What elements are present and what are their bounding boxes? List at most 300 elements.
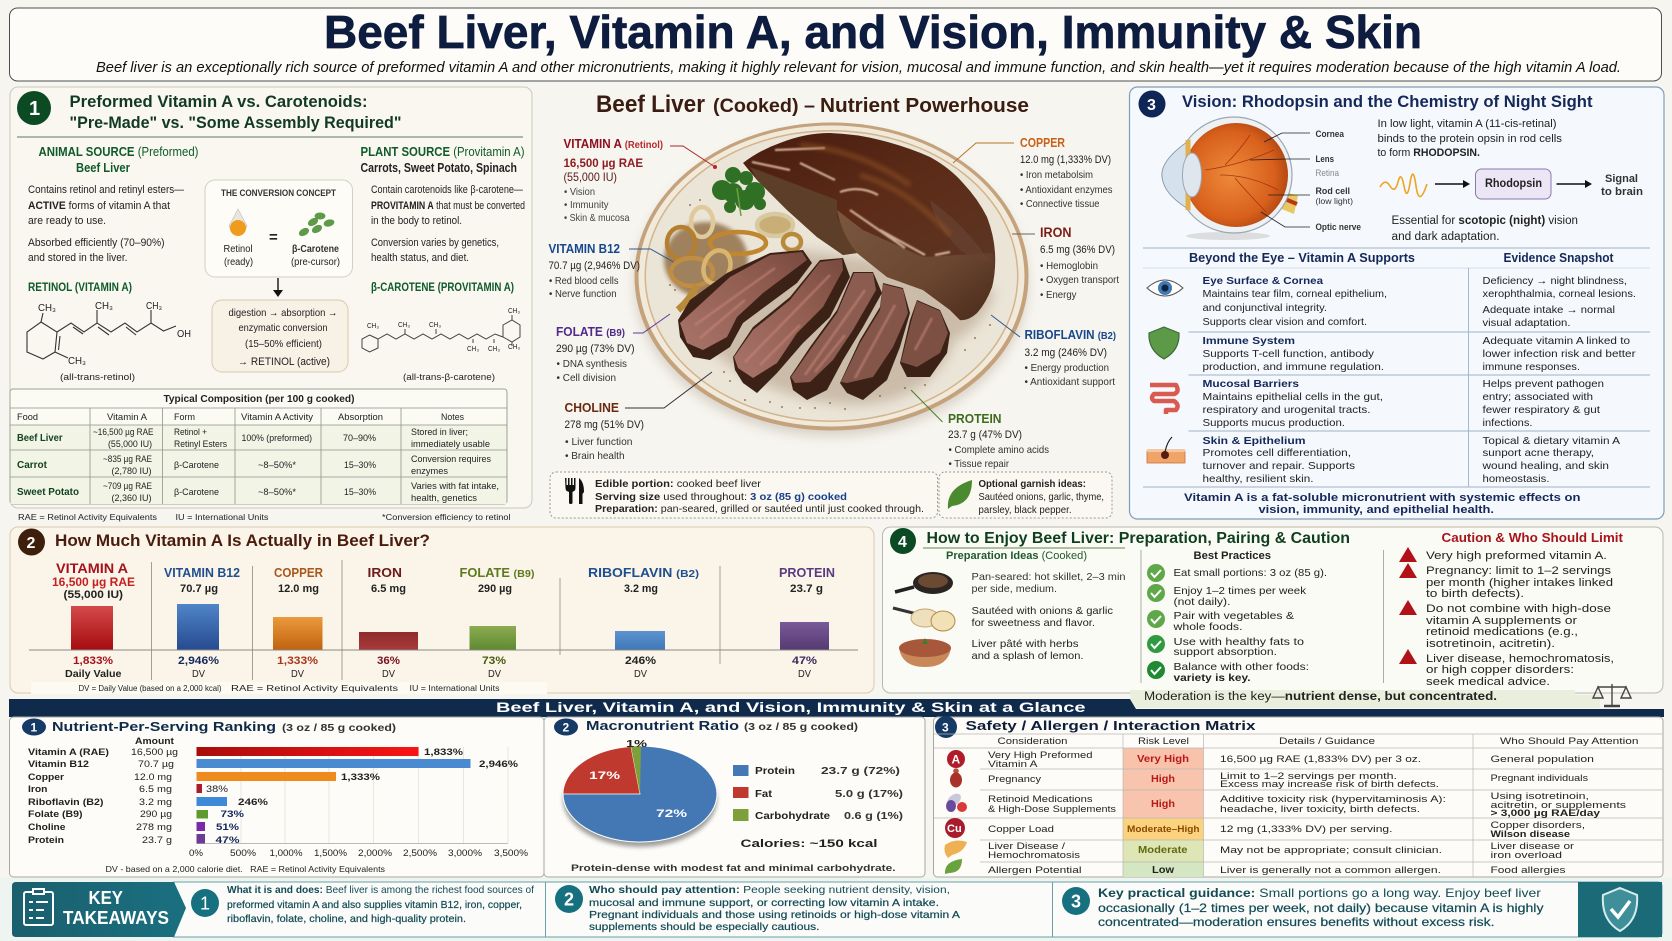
row: copper load: Moderate–High [1127,824,1200,835]
center heading: Nutrient Powerhouse [820,95,1029,117]
glance panel 2: macronutrient ratio: (3 oz / 85 g cooked) [744,722,858,733]
bar: copper: COPPER [274,566,323,580]
bar: vitamin B12: 2,946% [178,655,219,667]
row: immune system: Supports T-cell function, antibody [1202,348,1375,360]
icon: onions [893,608,955,631]
row: vitamin B12: 70.7 µg [138,759,174,770]
composition table: 100% (preformed) [242,433,312,444]
callout: folate: • DNA synthesis [556,358,627,370]
takeaway 2: Pregnant individuals and those using retinoids or high-dose vitamin A [589,909,960,921]
rhodopsin pathway [1380,169,1643,199]
takeaway 3: Key practical guidance: Small portions go a long way. Enjoy beef liver [1098,886,1541,900]
row: liver disease [944,841,1574,861]
composition table: ~16,500 µg RAE [93,427,154,438]
badge 1 [17,91,51,125]
row: pregnancy: Excess may increase risk of birth defects. [1220,779,1439,790]
row: choline: 278 mg [136,822,172,833]
row: retinoid medications: headache, liver toxicity, birth defects. [1220,804,1420,815]
icon: leaf [948,480,972,509]
preparation ideas: Sautéed with onions & garlic [972,605,1113,617]
row: retinoid medications: & High-Dose Supplements [988,804,1116,815]
row: liver disease: Moderate [1138,845,1188,856]
panel 2 footnote: IU = International Units [410,684,500,693]
pie legend: 5.0 g (17%) [835,788,903,800]
pie chart: 17% [589,770,620,782]
callout: vitamin B12: VITAMIN B12 [548,241,620,256]
digestion steps box: enzymatic conversion [238,322,328,334]
center heading: (Cooked) – [713,96,815,117]
panel 1 heading: "Pre-Made" vs. "Some Assembly Required" [70,113,402,132]
pie legend: Carbohydrate [755,810,830,822]
composition table: Vitamin A [107,412,148,423]
bar: protein [779,566,835,680]
beta-carotene structure: β-CAROTENE (PROVITAMIN A) [371,280,514,294]
animal source column [28,145,198,264]
row: pregnancy [950,768,1588,790]
row: eye surface: Adequate intake → normal [1482,304,1615,316]
bar: vitamin A: 1,833% [73,655,113,667]
slice 5 [900,300,950,377]
takeaway 3 [1062,886,1544,929]
row: folate [28,809,245,820]
callout: vitamin A: • Skin & mucosa [564,212,630,224]
icon: eye [1147,280,1183,296]
pie legend: 23.7 g (72%) [821,765,900,777]
row: vitamin A: Vitamin A (RAE) [28,747,109,758]
best practices: Pair with vegetables & [1174,610,1294,622]
row: liver disease: Liver disease or [1490,841,1574,852]
badge: 1 [30,720,38,734]
row: eye surface: Maintains tear film, corneal epithelium, [1202,288,1387,300]
callout: copper: • Antioxidant enzymes [1020,184,1112,196]
column chart: nutrient bars [29,561,858,680]
best practices: Enjoy 1–2 times per week [1174,585,1307,597]
pie chart [563,739,717,847]
bar: folate: FOLATE (B9) [460,566,534,580]
beta-carotene structure [362,280,520,383]
callout: protein: 23.7 g (47% DV) [948,429,1022,441]
row: immune system: Adequate vitamin A linked to [1482,335,1630,347]
row: copper load: Copper Load [988,824,1054,835]
callout: riboflavin: 3.2 mg (246% DV) [1024,347,1107,359]
garnish note: Sautéed onions, garlic, thyme, [978,491,1104,503]
x axis labels [189,848,528,858]
eye anatomy diagram: Optic nerve [1316,222,1361,233]
right lower lobe [837,210,994,320]
row: eye surface: and conjunctival integrity. [1202,302,1327,314]
row: skin and epithelium: Topical & dietary vitamin A [1482,435,1620,447]
caution list: Very high preformed vitamin A. [1426,550,1607,562]
caution list: per month (higher intakes linked [1426,577,1613,589]
composition table: ~709 µg RAE [103,481,152,492]
composition table: (2,360 IU) [112,493,152,504]
row: protein: 47% [216,835,240,846]
callout: vitamin A: VITAMIN A (Retinol) [564,136,663,151]
row: very high vitamin A: 16,500 µg RAE (1,833% DV) per 3 oz. [1220,754,1421,765]
garnish note [939,472,1112,518]
icon: intestine [1150,385,1178,414]
row: skin and epithelium: sunport acne therapy, [1482,447,1594,459]
rhodopsin explanation: In low light, vitamin A (11-cis-retinal) [1378,118,1556,130]
preparation ideas: for sweetness and flavor. [972,617,1095,629]
bar: copper: 1,333% [277,655,318,667]
row: retinoid medications: Additive toxicity risk (hypervitaminosis A): [1220,794,1446,805]
bar: protein: DV [798,668,811,680]
row: immune system: immune responses. [1482,361,1580,373]
gloss highlights [752,148,950,255]
badge: 3 [942,720,949,734]
pie legend: Fat [755,788,773,800]
composition table: (2,780 IU) [112,466,152,477]
panel 2: how much vitamin A [10,527,874,694]
bar: riboflavin [588,566,699,680]
composition table: 15–30% [344,460,376,471]
panel 2 footnote: DV = Daily Value (based on a 2,000 kcal) [78,684,222,693]
callout: vitamin A: (55,000 IU) [564,170,617,184]
row: protein: Protein [28,835,64,846]
panel 2 heading: How Much Vitamin A Is Actually in Beef Liver? [55,532,430,550]
caution list: retinoid medications (e.g., [1426,626,1578,638]
bar: vitamin A: Daily Value [65,668,122,680]
row: protein: 23.7 g [142,835,172,846]
row: folate: 290 µg [140,809,172,820]
whole liver [743,133,995,320]
digestion steps box: (15–50% efficient) [245,338,322,350]
bar: protein: PROTEIN [779,566,835,580]
bar: vitamin A [52,561,135,680]
row: copper: Copper [28,772,64,783]
bar: vitamin A: 16,500 µg RAE [52,577,135,589]
icon: shield check [1578,882,1662,937]
row: very high vitamin A: Very High [1137,754,1189,765]
key takeaways label: KEY [88,887,124,908]
preparation ideas: Pan-seared: hot skillet, 2–3 min [972,571,1126,583]
row: retinoid medications: Retinoid Medications [988,794,1093,805]
bar: riboflavin: 3.2 mg [624,583,658,595]
matrix header: Details / Guidance [1279,736,1375,747]
row: immune system: production, and immune regulation. [1202,361,1384,373]
takeaway 2 [555,884,960,933]
badge 1: 1 [29,98,40,120]
row: mucosal barriers: Mucosal Barriers [1202,378,1299,390]
badge: 2 [562,720,570,734]
beta-carotene structure: CH₃ [367,323,379,330]
x axis labels: 0% [189,848,203,858]
horizontal bar chart: Amount [135,736,175,747]
ranking footnote: DV - based on a 2,000 calorie diet. RAE = Retinol Activity Equivalents [106,864,385,874]
horizontal bar chart [28,736,528,858]
icon: green leaf [945,859,962,874]
row: riboflavin: 3.2 mg [139,797,172,808]
icon: fork and knife [565,478,584,504]
panel 2 footnote: RAE = Retinol Activity Equivalents [231,684,398,693]
key takeaways label: TAKEAWAYS [63,907,169,928]
animal source column: Contains retinol and retinyl esters— [28,184,184,196]
slice 2 [733,258,850,393]
row: riboflavin: 246% [238,797,269,808]
row: immune system: lower infection risk and better [1482,348,1636,360]
retinol structure: (all-trans-retinol) [60,372,135,383]
parsley garnish [712,167,766,216]
row: iron: 6.5 mg [139,784,172,795]
callout: riboflavin: RIBOFLAVIN (B2) [1024,327,1116,342]
icon: pregnancy [950,768,962,788]
edible portion note [550,472,938,518]
section banner: at a glance: Beef Liver, Vitamin A, and Vision, Immunity & Skin at a Glance [496,699,1086,715]
bar: vitamin B12: VITAMIN B12 [164,566,240,580]
x axis labels: 500% [230,848,256,858]
row: iron: Iron [28,784,48,795]
row: copper: 12.0 mg [134,772,172,783]
icon: pate bowl [899,638,951,667]
edible portion note: Preparation: pan-seared, grilled or sautéed until just cooked through. [595,503,924,515]
row: protein [28,834,240,846]
row: copper load: 12 mg (1,333% DV) per serving. [1220,824,1392,835]
macro heading: Macronutrient Ratio [586,718,739,733]
bar: vitamin B12: 70.7 µg [180,583,218,595]
composition table: Notes [441,412,464,423]
row: immune system [1149,327,1636,373]
row: allergen potential: Low [1152,865,1174,876]
row: mucosal barriers: Maintains epithelial cells in the gut, [1202,391,1383,403]
row: very high vitamin A: Very High Preformed [988,750,1092,761]
bar: vitamin A: (55,000 IU) [64,589,123,601]
rhodopsin explanation: to form RHODOPSIN. [1378,147,1480,159]
callout: choline: 278 mg (51% DV) [564,419,644,431]
bar: folate: DV [488,668,501,680]
row: vitamin B12: Vitamin B12 [28,759,89,770]
row: very high vitamin A: General population [1490,754,1594,765]
takeaway 1: riboflavin, folate, choline, and high-quality protein. [227,913,466,925]
callout: protein: • Tissue repair [948,458,1009,470]
edible portion note: Edible portion: cooked beef liver [595,478,762,490]
icon: retinol drop [229,209,247,236]
row: copper load: Wilson disease [1490,829,1570,840]
caution list: Liver disease, hemochromatosis, [1426,653,1614,665]
retinol structure: RETINOL (VITAMIN A) [28,280,132,294]
plate specks [670,200,990,409]
preparation ideas: and a splash of lemon. [972,650,1084,662]
retinol structure: CH₃ [38,303,56,314]
bar: folate: 290 µg [478,583,512,595]
retinol structure: CH₃ [146,301,162,312]
callout: folate [556,314,670,384]
row: choline: Choline [28,822,66,833]
row: skin and epithelium: Skin & Epithelium [1202,435,1306,447]
eye anatomy diagram: Cornea [1316,129,1345,140]
best practices: support absorption. [1174,646,1277,658]
retinol structure [27,280,191,383]
row: riboflavin: Riboflavin (B2) [28,797,104,808]
arrow: conversion down [273,278,283,297]
composition table: Vitamin A Activity [241,412,313,423]
plant source column: Carrots, Sweet Potato, Spinach [360,161,517,175]
scotopic note: Essential for scotopic (night) vision [1392,215,1578,227]
icon: pills [945,791,967,812]
table footnotes [18,512,511,522]
row: retinoid medications: High [1151,799,1175,810]
moderation banner [1130,684,1631,708]
row: very high vitamin A: Vitamin A [988,759,1038,770]
callout: iron: IRON [1040,225,1072,240]
row: retinoid medications: acitretin, or supplements [1490,800,1626,811]
row: skin and epithelium: homeostasis. [1482,473,1550,485]
callout: folate: FOLATE (B9) [556,324,625,339]
conversion concept box: (pre-cursor) [291,257,340,268]
bar: iron: DV [382,668,395,680]
badge [22,718,46,736]
scotopic note: and dark adaptation. [1392,231,1500,243]
best practices: Balance with other foods: [1174,661,1309,673]
icon: check marks [1147,564,1165,679]
row: riboflavin [28,797,269,808]
glance panel 1: nutrient ranking [10,717,544,877]
bar: copper [273,566,323,680]
callout: iron: • Energy [1040,289,1077,301]
callout: vitamin B12: 70.7 µg (2,946% DV) [548,260,640,272]
bar: folate: 73% [482,655,506,667]
digestion steps box: digestion → absorption → [228,307,338,319]
panel 3: vision and rhodopsin [1130,87,1664,519]
callout: copper: COPPER [1020,135,1065,150]
main title: Beef Liver, Vitamin A, and Vision, Immunity & Skin [324,6,1422,58]
bar: protein: 47% [792,655,817,667]
callout: vitamin A: 16,500 µg RAE [564,156,643,170]
bar: vitamin B12 [164,566,240,680]
composition table: ~8–50%* [258,460,296,471]
row: eye surface: xerophthalmia, corneal lesions. [1482,288,1636,300]
badge 4 [890,528,916,554]
composition table: Form [174,412,195,423]
x axis labels: 2,500% [403,848,437,858]
composition table: ~8–50%* [258,487,296,498]
panel 3 summary [1184,492,1581,516]
plant source column: PROVITAMIN A that must be converted [371,200,525,212]
matrix header: Risk Level [1138,736,1189,747]
callout: choline [564,372,712,462]
badge 3: 3 [1147,97,1156,114]
callout: iron: • Hemoglobin [1040,260,1098,272]
conversion concept box: β-Carotene [292,244,339,255]
panel: beef liver nutrient powerhouse [548,91,1119,518]
moderation banner: Moderation is the key— nutrient dense, but concentrated. [1144,691,1497,703]
row: iron: 38% [206,784,229,795]
bar: vitamin A: VITAMIN A [56,561,128,576]
callout: vitamin B12: • Red blood cells [549,275,618,287]
panel 3 summary: vision, immunity, and epithelial health. [1258,504,1494,516]
row: vitamin A [28,747,464,758]
table footnotes: IU = International Units [176,512,268,522]
composition table: Typical Composition (per 100 g cooked) [164,393,354,405]
matrix header: Consideration [998,736,1068,747]
rhodopsin explanation: binds to the protein opsin in rod cells [1378,133,1563,145]
takeaway 3: 3 [1071,892,1081,912]
row: mucosal barriers [1150,378,1604,429]
panel 1 heading [70,92,402,132]
plant source column: Contain carotenoids like β-carotene— [371,184,523,196]
composition table: Sweet Potato [17,486,79,498]
row: pregnancy: Pregnancy [988,774,1041,785]
animal source column: ACTIVE forms of vitamin A that [28,200,170,212]
best practices: (not daily). [1174,596,1230,608]
row: retinoid medications: Using isotretinoin, [1490,791,1589,802]
callout: vitamin A [564,136,717,224]
callout: protein: PROTEIN [948,411,1002,426]
plant source column: Conversion varies by genetics, [371,237,499,249]
composition table: Carrot [17,459,47,471]
composition table: enzymes [411,466,448,477]
row: copper [28,772,381,783]
row: liver disease: Hemochromatosis [988,850,1080,861]
key takeaways strip [0,878,1672,941]
panel 1 heading: Preformed Vitamin A vs. Carotenoids: [70,92,368,111]
preparation ideas [893,550,1126,667]
row: mucosal barriers: entry; associated with [1482,391,1593,403]
slice 4 [840,283,910,400]
x axis labels: 1,500% [314,848,347,858]
composition table: 70–90% [343,433,377,444]
preparation ideas: Liver pâté with herbs [972,638,1078,650]
beta-carotene structure: CH₃ [467,346,479,353]
row: choline: 51% [216,822,240,833]
callout: folate: 290 µg (73% DV) [556,343,634,355]
callout: choline: • Brain health [565,450,625,462]
icon: clipboard [24,889,53,925]
pie legend: Protein [755,765,795,777]
panel 2 footnote [31,682,547,694]
panel 4 heading: How to Enjoy Beef Liver: Preparation, Pairing & Caution [926,530,1350,547]
row: mucosal barriers: fewer respiratory & gut [1482,404,1600,416]
bar: riboflavin: DV [634,668,647,680]
takeaway 2: 2 [564,890,574,910]
preparation ideas: per side, medium. [972,583,1057,595]
pie legend [733,765,903,850]
risk matrix table [934,734,1663,877]
scotopic note [1392,215,1578,243]
callout: copper: • Connective tissue [1020,198,1100,210]
icon: Cu badge: Cu [947,823,962,835]
takeaway 2: Who should pay attention: People seeking nutrient density, vision, [589,884,950,896]
row: skin and epithelium: wound healing, and skin [1481,460,1609,472]
caution list: Caution & Who Should Limit [1442,530,1624,545]
animal source column: ANIMAL SOURCE (Preformed) [38,145,198,159]
row: iron [28,784,229,795]
row: skin and epithelium: healthy, resilient skin. [1202,473,1314,485]
takeaway 1: 1 [200,894,210,914]
bar: iron [359,566,418,680]
caution list: seek medical advice. [1426,676,1550,688]
badge 2 [18,528,45,556]
composition table: Varies with fat intake, [411,481,499,492]
best practices: variety is key. [1174,672,1251,684]
retinol structure: CH₃ [95,301,113,312]
composition table: immediately usable [411,439,490,450]
row: vitamin A: 1,833% [424,747,464,758]
composition table: (55,000 IU) [108,439,152,450]
eye anatomy diagram: Retina [1316,168,1340,179]
composition table: Absorption [338,412,383,423]
row: skin and epithelium: turnover and repair. Supports [1202,460,1355,472]
retinol structure: CH₃ [68,356,86,367]
row: allergen potential: Liver is generally not a common allergen. [1220,865,1441,876]
conversion concept box: (ready) [224,257,253,268]
icon: balance scale [1593,684,1631,706]
animal source column: and stored in the liver. [28,252,128,264]
slice 3 [790,272,882,400]
conversion concept box: = [269,229,278,246]
row: vitamin B12: 2,946% [479,759,519,770]
callout: vitamin B12 [548,241,674,300]
